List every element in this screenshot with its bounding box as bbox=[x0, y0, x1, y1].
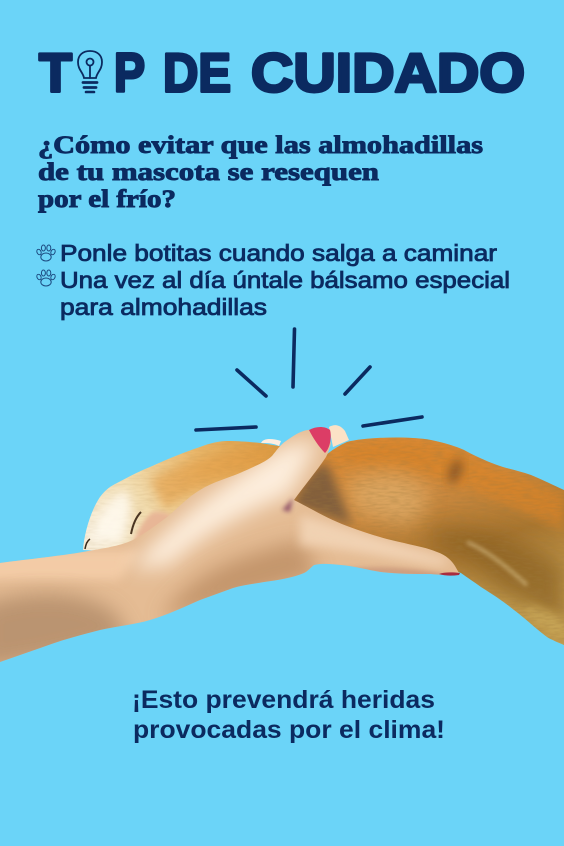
title: CUIDADO bbox=[251, 42, 525, 104]
icon: light bulb bbox=[78, 51, 102, 92]
bullet 1 text: Ponle botitas cuando salga a caminar bbox=[60, 240, 497, 266]
question heading: de tu mascota se resequen bbox=[38, 159, 379, 186]
dog paw bbox=[83, 441, 280, 550]
dog leg bbox=[290, 430, 564, 650]
icon: paw bullet 2 bbox=[36, 270, 56, 286]
bullet 2 text bbox=[60, 267, 510, 320]
title: DE bbox=[163, 42, 231, 104]
icon: paw bullet 1 bbox=[36, 245, 56, 261]
red nail on finger bbox=[439, 572, 460, 576]
title: T bbox=[39, 42, 72, 104]
photo: hand holding dog paw bbox=[0, 420, 564, 670]
question heading bbox=[38, 132, 483, 213]
title bbox=[39, 42, 525, 104]
ring fingertip behind paw bbox=[261, 439, 281, 446]
fingertip behind thumb bbox=[329, 425, 349, 447]
question heading: ¿Cómo evitar que las almohadillas bbox=[38, 132, 483, 159]
closing message: ¡Esto prevendrá heridas bbox=[132, 686, 435, 714]
red nail on thumb bbox=[309, 427, 331, 453]
bullet 2 text: Una vez al día úntale bálsamo especial bbox=[60, 267, 510, 293]
closing message: provocadas por el clima! bbox=[133, 716, 445, 744]
question heading: por el frío? bbox=[38, 186, 176, 213]
bullet list bbox=[36, 240, 510, 320]
title: P bbox=[114, 42, 145, 104]
bullet 2 text: para almohadillas bbox=[60, 294, 267, 320]
closing message bbox=[132, 686, 445, 744]
emphasis rays bbox=[196, 329, 422, 430]
human hand and arm bbox=[0, 420, 470, 670]
